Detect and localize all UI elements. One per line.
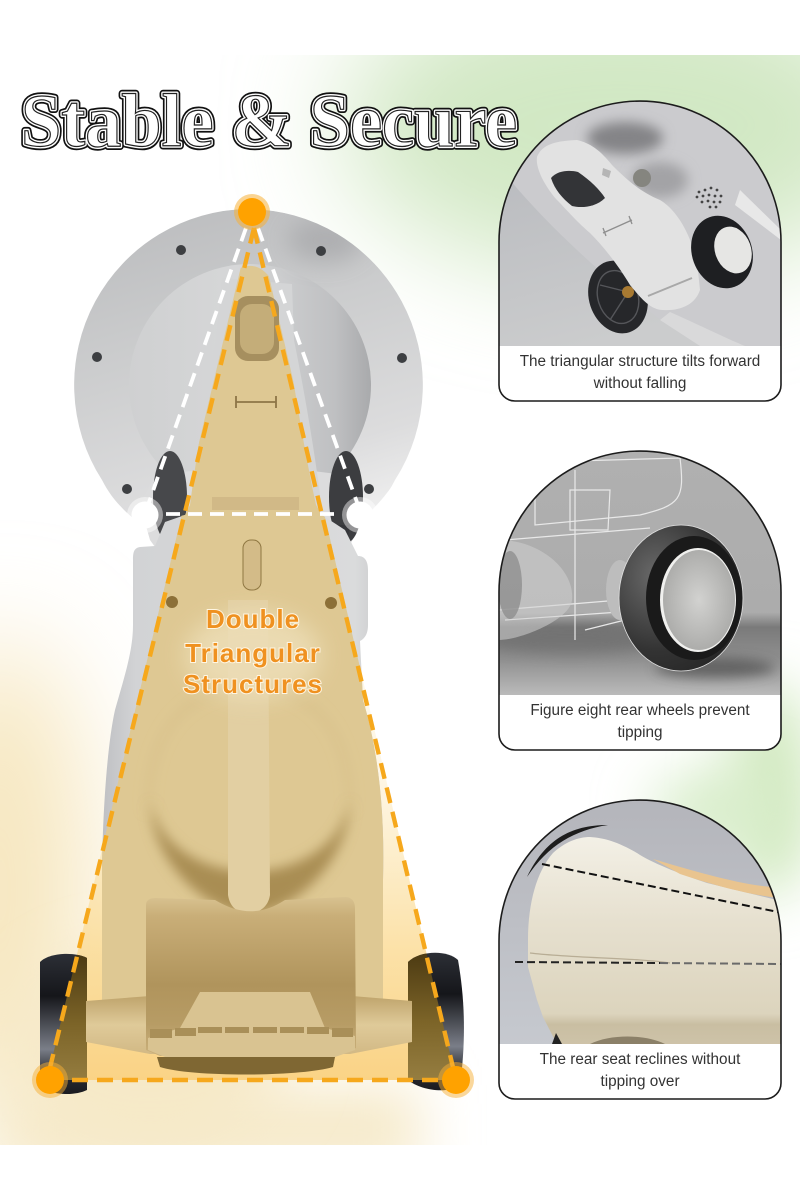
gray body	[102, 515, 383, 1010]
orange seat strip	[653, 859, 778, 898]
photo: seat close-up	[499, 800, 785, 1050]
center label: Structures	[183, 669, 323, 699]
rear axle	[86, 996, 412, 1054]
caption: The triangular structure tilts forward	[520, 353, 760, 370]
steering recess	[235, 296, 279, 361]
wheel shadow	[655, 658, 775, 678]
caption	[540, 1051, 741, 1090]
caption: tipping over	[600, 1073, 680, 1090]
seat spine	[228, 600, 270, 913]
caption	[520, 353, 760, 392]
center label: Triangular	[185, 638, 321, 668]
photo: rear wheel close-up	[480, 450, 781, 696]
tan tinted body inside triangle	[102, 266, 383, 1010]
caption	[530, 702, 750, 741]
center label glow	[185, 611, 321, 699]
panel: rear seat	[499, 800, 785, 1099]
caption: Figure eight rear wheels prevent	[530, 702, 750, 719]
center label: Double	[206, 604, 300, 634]
side holes	[166, 596, 337, 609]
node: top orange	[234, 194, 270, 230]
title: Stable & Secure	[21, 80, 517, 163]
front wheels	[140, 451, 363, 575]
node: white right	[342, 497, 378, 533]
rear housing	[146, 897, 356, 1056]
panel: triangular structure	[499, 100, 781, 401]
title: Stable & Secure	[21, 80, 517, 163]
orange dashed triangle	[47, 228, 456, 1080]
underside	[157, 1057, 335, 1074]
neck ledge	[212, 497, 299, 510]
dashed tilt lines	[515, 864, 781, 964]
product: top view of ride-on car	[40, 209, 464, 1094]
seat shape	[528, 837, 785, 1050]
triangle fill: outer orange zone	[47, 212, 456, 1080]
white arm	[537, 140, 700, 310]
caption: tipping	[617, 724, 663, 741]
speaker dots	[696, 187, 722, 208]
panel: rear wheels	[480, 450, 781, 750]
logo mark	[236, 396, 276, 408]
white dashed triangle	[148, 228, 358, 514]
slot	[243, 540, 261, 590]
seat seam	[530, 953, 670, 963]
rear wheel	[588, 260, 648, 334]
node: white left	[127, 497, 163, 533]
rear wheels	[40, 953, 464, 1094]
wheel tire	[619, 525, 743, 671]
motion swoosh	[527, 825, 608, 877]
front wheel	[691, 216, 753, 288]
gray neck fork	[190, 278, 322, 510]
rear bumper	[148, 992, 355, 1057]
seat hollow	[148, 690, 350, 915]
center label	[183, 604, 323, 699]
rear vents	[150, 1027, 353, 1038]
node: bottom right orange	[438, 1062, 474, 1098]
caption: without falling	[593, 375, 686, 392]
caption: The rear seat reclines without	[540, 1051, 741, 1068]
node: bottom left orange	[32, 1062, 68, 1098]
gray rear disc	[74, 210, 423, 516]
wheel slot	[551, 171, 605, 207]
photo: front wheels close-up	[499, 100, 781, 346]
title: Stable & Secure	[21, 80, 517, 163]
car outline lines	[499, 458, 682, 640]
